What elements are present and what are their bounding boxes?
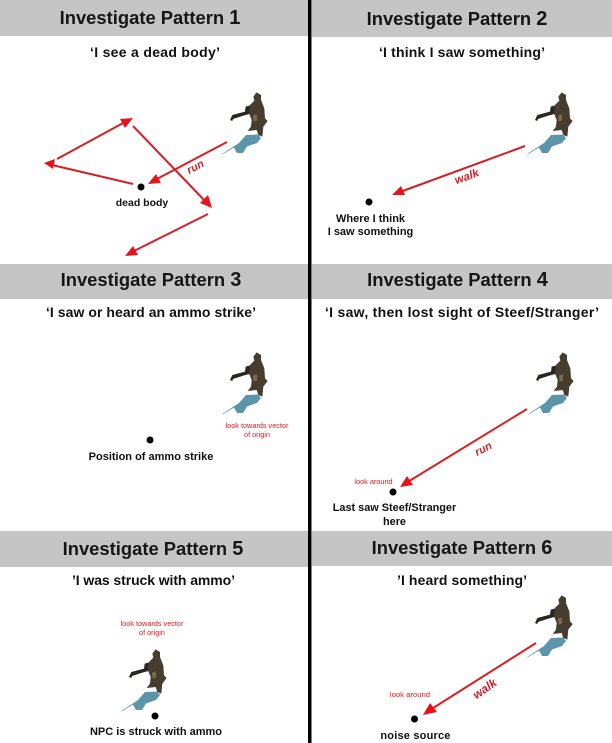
panel: pattern 5 [0, 531, 308, 738]
heading: pattern 6 [312, 531, 612, 566]
subtitle: pattern 3: ‘I saw or heard an ammo strike’ [46, 304, 256, 320]
heading: pattern 4 [312, 264, 612, 299]
marker: noise source [411, 716, 418, 722]
heading: pattern 5: Investigate Pattern 5 [63, 538, 243, 560]
heading: pattern 6: Investigate Pattern 6 [372, 537, 552, 559]
icon: NPC figure [222, 352, 268, 415]
heading: pattern 2 [312, 0, 612, 37]
subtitle: pattern 1: ‘I see a dead body’ [90, 44, 220, 60]
subtitle: pattern 5: ’I was struck with ammo’ [72, 572, 235, 588]
heading: pattern 5 [0, 531, 308, 567]
label: run: run [473, 440, 494, 459]
marker: struck position [152, 712, 158, 720]
subtitle: pattern 4: ‘I saw, then lost sight of Steef/Stranger’ [325, 304, 599, 320]
panel: pattern 3 [0, 264, 308, 463]
arrow: search leg 4 [125, 214, 208, 256]
icon: NPC figure [528, 352, 574, 415]
panel: pattern 2 [312, 0, 612, 238]
label: last saw: Last saw Steef/Stranger [333, 502, 457, 514]
arrow: walk [392, 146, 525, 195]
arrow: walk [423, 643, 536, 715]
heading: pattern 1: Investigate Pattern 1 [60, 7, 240, 29]
center divider [308, 0, 312, 743]
label: NPC is struck: NPC is struck with ammo [90, 726, 222, 738]
label: look towards vector of origin: look towards vector [226, 421, 289, 430]
label: look around: look around [354, 477, 393, 486]
marker: suspected location [366, 198, 372, 206]
heading: pattern 2: Investigate Pattern 2 [367, 8, 547, 30]
arrow: search leg 3 [133, 126, 212, 208]
marker: dead body [138, 184, 144, 190]
panel: pattern 6 [312, 531, 612, 742]
label: look towards vector of origin: look towards vector [121, 619, 184, 628]
subtitle: pattern 2: ‘I think I saw something’ [379, 44, 545, 60]
label: where I think: I saw something [328, 226, 413, 238]
label: look towards vector of origin: of origin [244, 430, 270, 439]
marker: ammo strike [146, 436, 154, 444]
icon: NPC figure [222, 92, 268, 155]
label: noise source: noise source [380, 730, 451, 742]
marker: last seen [390, 488, 396, 496]
arrow: run [400, 409, 527, 487]
label: run: run [185, 158, 206, 177]
heading: pattern 3: Investigate Pattern 3 [61, 269, 241, 291]
label: look towards vector of origin: of origin [139, 628, 165, 637]
label: position of ammo strike: Position of ammo strike [89, 451, 213, 463]
heading: pattern 3 [0, 264, 308, 299]
arrow: search leg 2 [57, 118, 133, 159]
label: walk: walk [470, 675, 500, 702]
label: look around: look around [390, 690, 430, 699]
panel: pattern 1 [0, 0, 308, 256]
heading: pattern 4: Investigate Pattern 4 [367, 269, 549, 291]
arrow: search leg 1 [44, 159, 133, 184]
heading: pattern 1 [0, 0, 308, 36]
icon: NPC figure [121, 649, 167, 712]
label: dead body: dead body [116, 197, 168, 209]
arrow: run to body [148, 142, 227, 184]
label: where I think: Where I think [336, 213, 406, 225]
panel: pattern 4 [312, 264, 612, 528]
icon: NPC figure [527, 595, 573, 658]
label: last saw: here [383, 516, 406, 528]
icon: NPC figure [527, 92, 573, 155]
label: walk: walk [453, 167, 481, 187]
subtitle: pattern 6: ’I heard something’ [397, 572, 527, 588]
